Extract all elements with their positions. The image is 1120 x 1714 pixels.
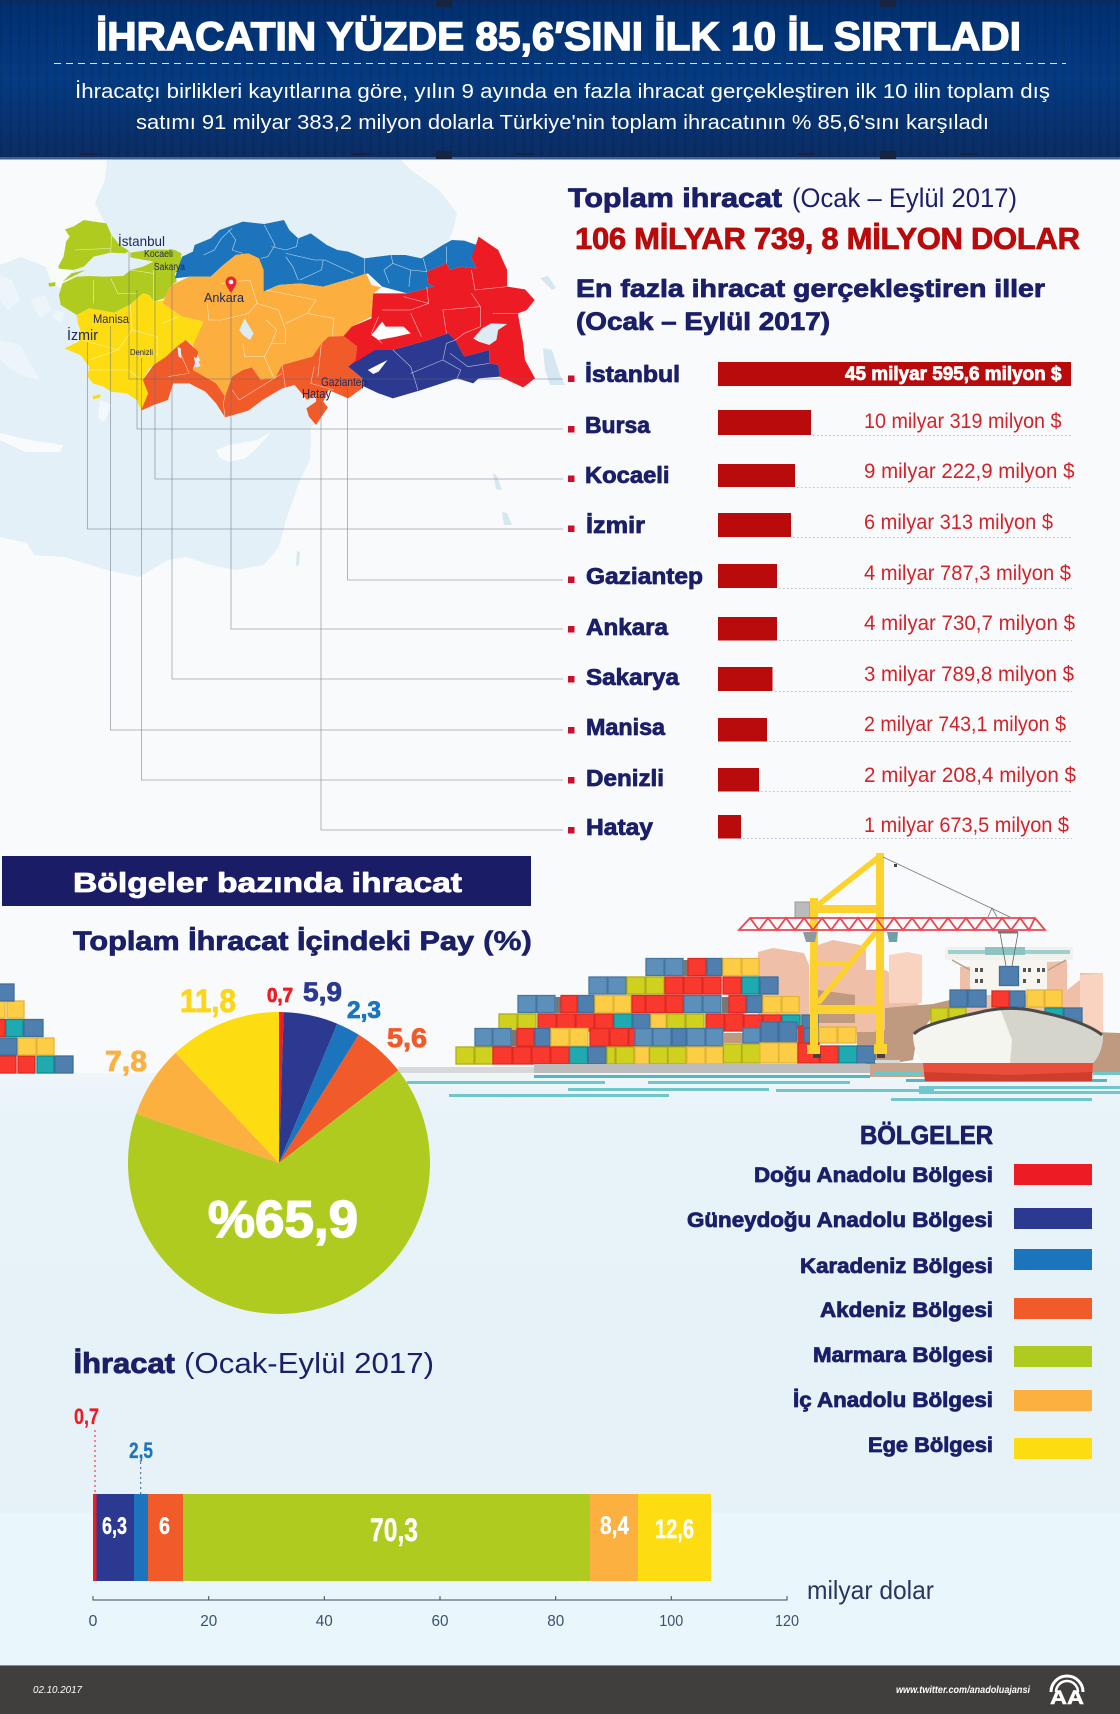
footer date: 02.10.2017 (33, 1685, 82, 1696)
port: ship superstructure (945, 931, 1073, 995)
stacked bar chart: exports by region: 8,4 (600, 1512, 629, 1540)
section banner: exports by region: Bölgeler bazında ihracat (73, 867, 462, 898)
port: container stacks (456, 958, 875, 1064)
row: Kocaeli (568, 460, 1075, 488)
map of Turkey by region (48, 220, 535, 425)
sea and islands behind the map (0, 159, 565, 577)
port: containers on ship (931, 990, 1082, 1024)
axis with ticks: 0 (89, 1613, 98, 1630)
row: İstanbul: İstanbul (585, 361, 680, 387)
heading: exports January-September 2017 (74, 1348, 434, 1380)
legend item: İç Anadolu: İç Anadolu Bölgesi (793, 1389, 993, 1412)
axis unit label: milyar dolar (807, 1575, 934, 1605)
map labels (67, 232, 367, 401)
axis with ticks: 100 (659, 1613, 683, 1630)
legend item: Güneydoğu Anadolu (687, 1208, 1092, 1232)
row: Gaziantep: Gaziantep (586, 563, 703, 589)
axis with ticks (89, 1596, 799, 1630)
legend item: Marmara: Marmara Bölgesi (813, 1344, 993, 1367)
row: Sakarya: 3 milyar 789,8 milyon $ (864, 663, 1074, 686)
map labels: Hatay (302, 386, 331, 401)
port: background buildings (758, 940, 1103, 1040)
row: Ankara: Ankara (586, 614, 668, 640)
heading: total export: Toplam ihracat (568, 183, 782, 213)
pie label: %65,9: %65,9 (208, 1191, 358, 1249)
legend: regions (687, 1120, 1092, 1459)
row: İstanbul (568, 361, 1071, 387)
map: lakes (177, 318, 507, 374)
heading: top exporting provinces: (Ocak – Eylül 2017) (576, 308, 830, 336)
section banner: exports by region (2, 856, 531, 906)
axis with ticks: 40 (316, 1613, 333, 1630)
port: left container stack (0, 984, 73, 1073)
axis with ticks: 60 (432, 1613, 449, 1630)
row: Kocaeli: Kocaeli (585, 462, 670, 488)
pie chart: share in total exports (105, 977, 430, 1314)
row: İzmir: İzmir (586, 512, 645, 538)
legend item: Marmara (813, 1344, 1092, 1367)
sea of Marmara (62, 253, 154, 282)
port: water waves (407, 1072, 1120, 1101)
bar chart: top 10 provinces (568, 361, 1076, 840)
row: Gaziantep (568, 562, 1072, 589)
callout: 0,7: 0,7 (74, 1404, 99, 1429)
illustration: port with containers, crane and ship (0, 853, 1120, 1101)
pie label: 0,7: 0,7 (267, 985, 293, 1007)
legend: regions: BÖLGELER (860, 1120, 993, 1150)
stacked bar chart: exports by region: 6,3 (102, 1513, 127, 1540)
row: Sakarya (568, 663, 1074, 692)
axis with ticks: 80 (547, 1613, 564, 1630)
legend item: Doğu Anadolu (754, 1164, 1092, 1187)
pie label: 2,3: 2,3 (347, 997, 381, 1024)
header subtitle (75, 80, 1050, 134)
map labels: İstanbul (118, 232, 165, 249)
axis with ticks: 120 (775, 1613, 799, 1630)
row: İzmir: 6 milyar 313 milyon $ (864, 511, 1053, 534)
row: Bursa: Bursa (585, 412, 650, 438)
map: Black Sea region (175, 220, 477, 293)
row: Hatay (568, 814, 1072, 840)
map labels: Manisa (93, 312, 129, 326)
row: Manisa: Manisa (586, 714, 665, 740)
pie label: 11,8: 11,8 (180, 983, 236, 1019)
legend item: Karadeniz (800, 1249, 1092, 1278)
row: Denizli (568, 764, 1076, 792)
callout: 0,7 (74, 1404, 99, 1494)
row: Bursa: 10 milyar 319 milyon $ (864, 410, 1062, 433)
heading: total export (568, 183, 1017, 213)
icon: agency logo: AA (1050, 1688, 1084, 1709)
map: Eastern Anatolia region (344, 237, 535, 387)
row: Bursa (568, 410, 1072, 438)
stacked bar chart: exports by region (74, 1404, 934, 1630)
port: crane (739, 853, 1045, 1058)
map: Mediterranean region (141, 336, 364, 425)
heading: total export: (Ocak – Eylül 2017) (792, 183, 1017, 213)
map: Aegean region (64, 293, 204, 410)
row: Denizli: Denizli (586, 765, 664, 791)
row: Hatay: 1 milyar 673,5 milyon $ (864, 814, 1069, 837)
port: ship hull (913, 1007, 1103, 1081)
row: Denizli: 2 milyar 208,4 milyon $ (864, 764, 1076, 787)
map labels: Kocaeli (144, 249, 173, 260)
pie label: 7,8: 7,8 (105, 1046, 147, 1078)
heading: exports January-September 2017: İhracat (74, 1348, 175, 1380)
row: İstanbul: 45 milyar 595,6 milyon $ (845, 363, 1062, 385)
stacked bar chart: exports by region: 70,3 (370, 1512, 418, 1548)
connector lines from map to cities (88, 252, 563, 830)
row: Manisa: 2 milyar 743,1 milyon $ (864, 713, 1066, 736)
header subtitle: İhracatçı birlikleri kayıtlarına göre, yılın 9 ayında en fazla ihracat gerçekleştiren ilk 10 ilin toplam dış (75, 80, 1050, 103)
row: Gaziantep: 4 milyar 787,3 milyon $ (864, 562, 1071, 585)
map: province borders (75, 225, 518, 417)
row: İzmir (568, 511, 1072, 538)
row: Ankara: 4 milyar 730,7 milyon $ (864, 612, 1075, 635)
legend item: Karadeniz: Karadeniz Bölgesi (800, 1255, 993, 1278)
icon: agency logo (1050, 1676, 1084, 1709)
footer url: www.twitter.com/anadoluajansi (896, 1684, 1031, 1696)
map labels: İzmir (67, 326, 98, 344)
heading: share in total exports: Toplam İhracat İçindeki Pay (73, 926, 474, 956)
callout: 2,5: 2,5 (129, 1438, 153, 1463)
pie label: 5,6: 5,6 (387, 1023, 427, 1053)
total export value: 106 MİLYAR 739, 8 MİLYON DOLAR (575, 221, 1080, 256)
heading: exports January-September 2017: (Ocak-Eylül 2017) (184, 1348, 434, 1380)
header subtitle: satımı 91 milyar 383,2 milyon dolarla Türkiye'nin toplam ihracatının % 85,6'sını karşıladı (136, 111, 989, 134)
heading: share in total exports: (%) (483, 926, 532, 956)
row: Hatay: Hatay (586, 814, 653, 840)
map: Southeastern Anatolia region (348, 333, 500, 398)
footer (0, 1665, 1120, 1714)
port: tan ground (818, 990, 1120, 1077)
callout: 2,5 (129, 1438, 153, 1494)
map labels: Sakarya (154, 262, 185, 273)
row: Kocaeli: 9 milyar 222,9 milyon $ (864, 460, 1075, 483)
icon: Ankara map pin (226, 276, 236, 293)
map labels: Ankara (204, 290, 245, 305)
legend item: Akdeniz: Akdeniz Bölgesi (820, 1299, 993, 1322)
heading: top exporting provinces: En fazla ihracat gerçekleştiren iller (576, 275, 1045, 303)
legend item: İç Anadolu (793, 1389, 1092, 1412)
map: Central Anatolia region (162, 253, 381, 397)
water background (0, 1073, 1120, 1665)
header panel (0, 0, 1120, 160)
map labels: Gaziantep (321, 375, 367, 389)
axis with ticks: 20 (200, 1613, 217, 1630)
stacked bar chart: exports by region: 6 (159, 1513, 170, 1540)
title: İHRACATIN YÜZDE 85,6′SINI İLK 10 İL SIRTLADI (96, 14, 1021, 59)
row: Manisa (568, 713, 1072, 742)
map: Marmara region (48, 220, 181, 315)
pie label: 5,9: 5,9 (303, 977, 342, 1007)
heading: top exporting provinces (576, 275, 1045, 336)
legend item: Ege (868, 1434, 1092, 1459)
legend item: Ege: Ege Bölgesi (868, 1434, 993, 1457)
port: dock (398, 1060, 900, 1073)
legend item: Güneydoğu Anadolu: Güneydoğu Anadolu Bölgesi (687, 1209, 993, 1232)
legend item: Akdeniz (820, 1298, 1092, 1322)
row: Ankara (568, 612, 1075, 640)
map labels: Denizli (130, 348, 153, 357)
stacked bar chart: exports by region: 12,6 (655, 1514, 694, 1544)
legend item: Doğu Anadolu: Doğu Anadolu Bölgesi (754, 1164, 993, 1187)
row: Sakarya: Sakarya (586, 664, 679, 690)
